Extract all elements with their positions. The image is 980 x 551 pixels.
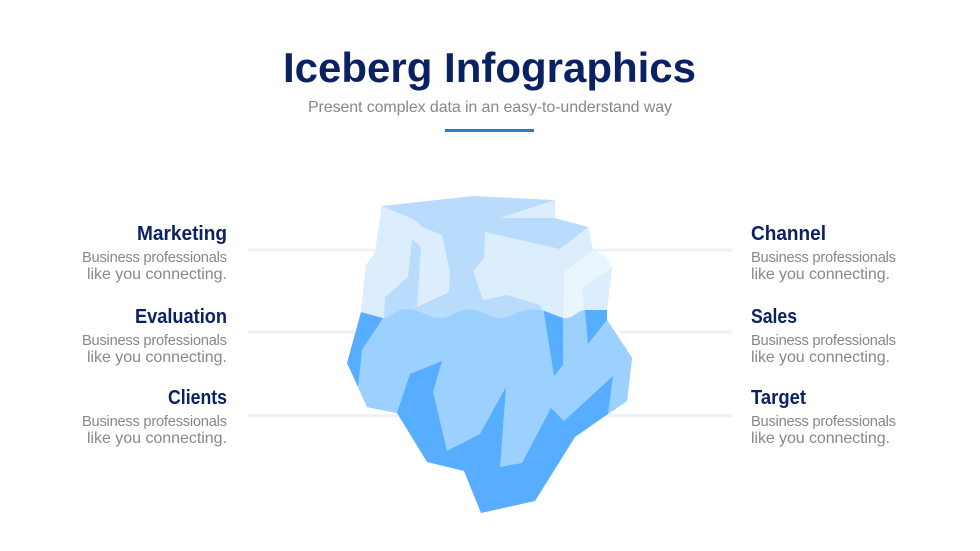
item: Clients: like you connecting. (87, 430, 227, 447)
item: Sales: like you connecting. (751, 349, 890, 366)
item: Channel (751, 223, 896, 283)
item: Target: like you connecting. (751, 430, 890, 447)
item: Marketing (82, 223, 227, 283)
centre ice facet (473, 227, 593, 318)
connector lines (248, 248, 732, 417)
top right ice facet (500, 200, 555, 218)
iceberg underwater base (347, 305, 632, 513)
item: Channel: Business professionals (751, 250, 896, 266)
accent bar (445, 129, 534, 132)
item: Sales (751, 306, 896, 366)
item: Clients: Clients (168, 387, 227, 409)
item: Evaluation: like you connecting. (87, 349, 227, 366)
item: Marketing: like you connecting. (87, 266, 227, 283)
item: Target (751, 387, 896, 447)
item: Marketing: Marketing (137, 223, 227, 245)
title: Iceberg Infographics (283, 44, 696, 91)
iceberg illustration (347, 196, 632, 513)
item: Clients: Business professionals (82, 414, 227, 430)
item: Sales: Sales (751, 306, 797, 328)
right ice facet (583, 268, 612, 310)
item: Sales: Business professionals (751, 333, 896, 349)
item: Target: Business professionals (751, 414, 896, 430)
left ice facet (361, 206, 450, 318)
bright ice facet (563, 250, 612, 318)
subtitle: Present complex data in an easy-to-understand way (308, 99, 672, 116)
item: Channel: Channel (751, 223, 826, 245)
item: Evaluation (82, 306, 227, 366)
iceberg underwater light facets (358, 300, 632, 467)
item: Channel: like you connecting. (751, 266, 890, 283)
item: Evaluation: Evaluation (135, 306, 227, 328)
item: Clients (82, 387, 227, 447)
item: Target: Target (751, 387, 806, 409)
item: Marketing: Business professionals (82, 250, 227, 266)
iceberg above water base (361, 196, 612, 318)
item: Evaluation: Business professionals (82, 333, 227, 349)
